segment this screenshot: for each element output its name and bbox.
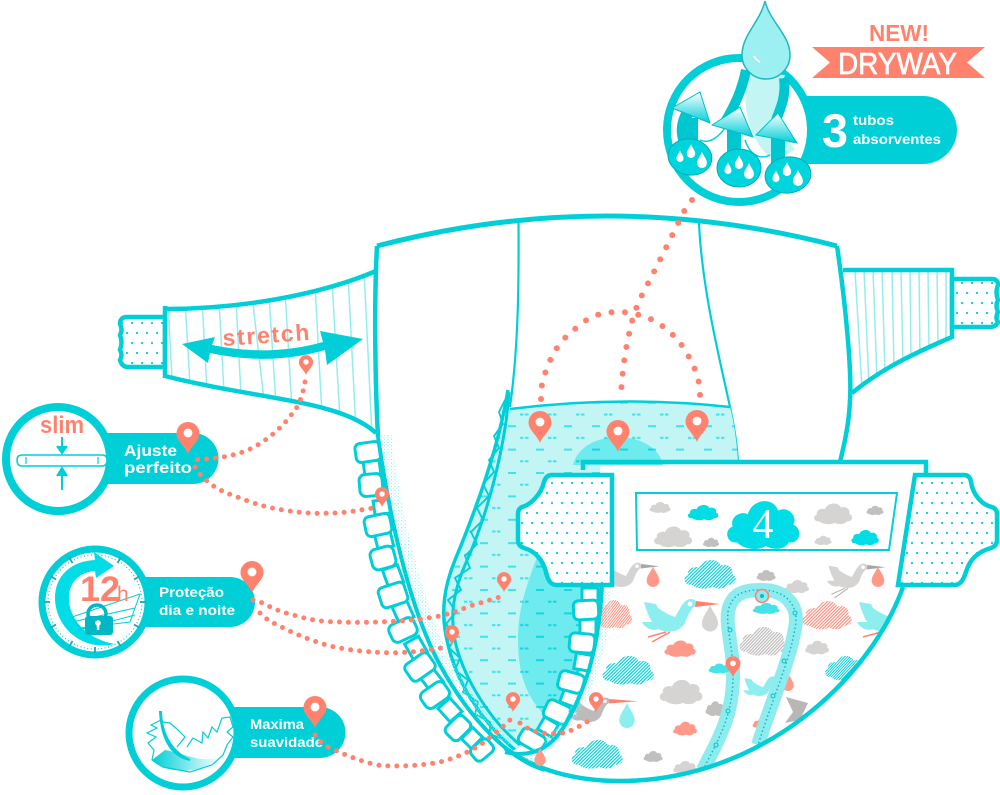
leg edge lines [378, 437, 602, 770]
faint coral drop at bottom [534, 748, 546, 766]
text: suavidade [250, 735, 324, 750]
diaper layers [72, 594, 140, 630]
pill [225, 707, 346, 758]
big number 3: 3 [822, 104, 848, 157]
callout pill: 3 tubos [790, 96, 957, 164]
stork wing: grey bottom [785, 697, 808, 723]
right panel dot pattern [898, 475, 997, 585]
text: dia e noite [159, 603, 236, 618]
12h text: 12 [80, 570, 120, 609]
new label: NEW! [869, 20, 929, 46]
wetness indicator tube [703, 590, 797, 770]
circle [129, 679, 237, 787]
left panel dot pattern [518, 475, 612, 585]
callout: Maxima suavidade [129, 679, 346, 787]
left tab [120, 317, 165, 367]
stretch double arrow [182, 331, 363, 365]
absorbent core [445, 401, 738, 751]
circle [42, 549, 148, 655]
slim word: slim [40, 412, 84, 439]
h unit: h [117, 583, 129, 606]
text: Proteção [159, 585, 224, 600]
arrows [672, 92, 797, 168]
left side wing [165, 270, 376, 435]
tubos absorventes text: absorventes [853, 132, 941, 147]
pill [140, 577, 255, 627]
circular arrow [55, 552, 115, 645]
callout: Proteção dia e noite [42, 549, 255, 655]
diaper waist body outline [375, 216, 850, 462]
leg ruffles [354, 441, 599, 763]
front panel [505, 462, 926, 781]
ribbon text: DRYWAY [838, 46, 957, 81]
droplet discs [665, 135, 813, 196]
dotted leader lines [190, 200, 700, 766]
stork: teal large [642, 599, 720, 642]
text: Maxima [250, 717, 305, 732]
callout: Dryway tubes [665, 1, 957, 202]
size number: 4 [752, 502, 774, 548]
diaper print: clouds and storks [569, 560, 911, 774]
left fastening panel [518, 475, 612, 585]
dial ring [44, 555, 146, 653]
stork: small teal [743, 676, 776, 696]
absorbent tube channel [683, 70, 795, 160]
zigzag elastic barrier [444, 390, 520, 750]
size label box [636, 493, 897, 550]
callout: Ajuste perfeito [6, 407, 219, 511]
water drop [742, 1, 790, 79]
stork: grey lower [569, 698, 638, 722]
stretch label: stretch [222, 319, 310, 351]
right fastening panel [898, 475, 997, 585]
text: Ajuste [124, 443, 177, 460]
feather [147, 712, 233, 772]
circle [6, 407, 110, 511]
stork: grey right [827, 564, 886, 598]
right tab [952, 279, 998, 327]
mesh bands along the leg [386, 435, 607, 760]
ribbon [812, 46, 985, 81]
stork: teal right edge [857, 602, 888, 638]
magnifier circle [667, 58, 811, 202]
pill [105, 433, 219, 484]
right side wing [843, 270, 952, 393]
slim sheet icon [17, 437, 107, 490]
text: perfeito [124, 460, 192, 477]
tubos absorventes text: tubos [853, 113, 894, 128]
stork: grey left [614, 562, 660, 587]
padlock [85, 605, 113, 635]
pins [176, 355, 708, 728]
